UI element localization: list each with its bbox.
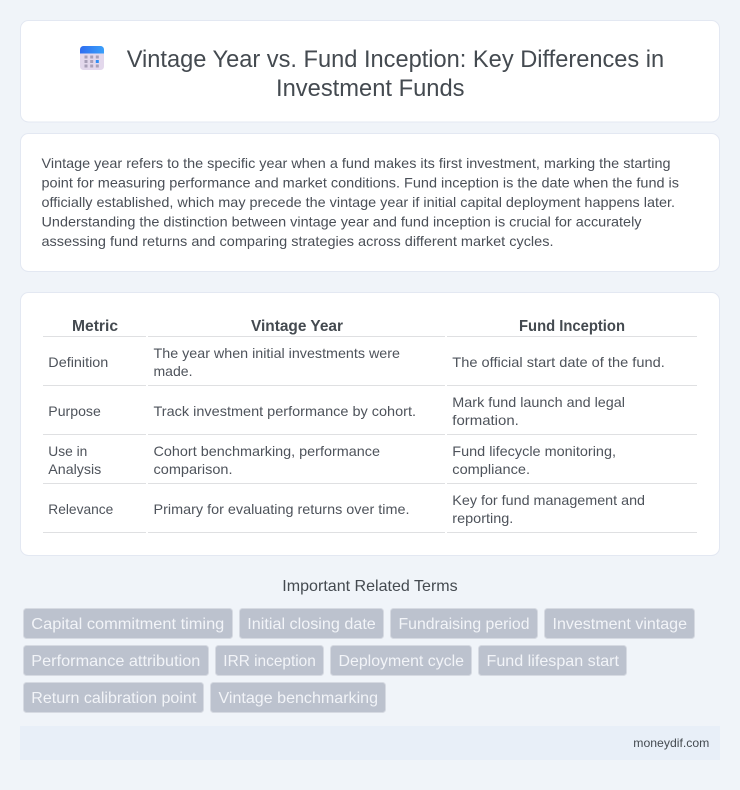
table row: use in analysis: compliance.	[452, 461, 530, 477]
table row: relevance: Primary for evaluating returns over time.	[154, 501, 410, 517]
tag: Deployment cycle	[338, 653, 464, 670]
table header row: Vintage Year	[251, 318, 343, 335]
table row: definition: The official start date of the fund.	[452, 354, 665, 370]
table row: purpose: Purpose	[48, 403, 101, 419]
tag	[24, 682, 204, 712]
footer bar	[20, 726, 720, 760]
table row: purpose: formation.	[452, 412, 519, 428]
table row: use in analysis: Cohort benchmarking, performance	[154, 443, 380, 459]
panel: intro paragraph	[20, 134, 720, 272]
text block: description: officially established, which may precede the vintage year if initial capital deployment happens later.	[42, 194, 675, 210]
heading: important related terms: Important Related Terms	[282, 578, 458, 595]
tag	[390, 608, 538, 638]
table row: relevance: reporting.	[452, 510, 513, 526]
tag: Performance attribution	[31, 653, 200, 670]
tag	[216, 646, 324, 676]
table row: use in analysis	[48, 443, 616, 477]
table row: use in analysis: Fund lifecycle monitoring,	[452, 443, 616, 459]
table header row	[72, 318, 625, 335]
icon: calendar	[80, 46, 104, 70]
table row: use in analysis: Use in	[48, 443, 87, 459]
header panel	[20, 20, 720, 122]
tag: Fundraising period	[398, 616, 530, 633]
title	[127, 46, 664, 102]
tag: IRR inception	[223, 653, 316, 670]
panel: related term tags	[24, 608, 694, 712]
tag: Investment vintage	[552, 616, 687, 633]
table row: purpose: Mark fund launch and legal	[452, 394, 625, 410]
tag	[478, 646, 626, 676]
title: Investment Funds	[276, 75, 464, 102]
text block: description: Vintage year refers to the specific year when a fund makes its first investment, marking the starting	[42, 155, 670, 171]
tag	[24, 608, 232, 638]
table header row: Fund Inception	[519, 318, 625, 335]
tag	[330, 646, 472, 676]
text block: description: point for measuring performance and market conditions. Fund inception is the date when the fund is	[42, 174, 679, 190]
table row: definition	[48, 345, 665, 379]
footer source text: moneydif.com	[633, 736, 709, 750]
table header row: Metric	[72, 318, 118, 335]
tag: Vintage benchmarking	[218, 690, 378, 707]
tag: Return calibration point	[31, 690, 197, 707]
tag: Fund lifespan start	[486, 653, 620, 670]
table row: purpose	[48, 394, 625, 428]
tag	[240, 608, 384, 638]
table row: use in analysis: comparison.	[154, 461, 232, 477]
text block: description: assessing fund returns and comparing strategies across different market cycles.	[42, 233, 554, 249]
tag	[24, 646, 208, 676]
panel: comparison table	[20, 292, 720, 556]
text block: description	[42, 155, 679, 249]
title: Vintage Year vs. Fund Inception: Key Differences in	[127, 46, 664, 73]
tag	[544, 608, 694, 638]
tag	[210, 682, 386, 712]
table row: relevance: Relevance	[48, 501, 114, 517]
table row: relevance: Key for fund management and	[452, 492, 645, 508]
table row: definition: Definition	[48, 354, 108, 370]
table row: purpose: Track investment performance by cohort.	[154, 403, 416, 419]
tag: Capital commitment timing	[31, 616, 224, 633]
tag: Initial closing date	[247, 616, 376, 633]
table row: use in analysis: Analysis	[48, 461, 101, 477]
table row: definition: The year when initial investments were	[154, 345, 400, 361]
table row: definition: made.	[154, 363, 192, 379]
text block: description: Understanding the distinction between vintage year and fund inception is crucial for accurately	[42, 214, 641, 230]
table row: relevance	[48, 492, 645, 526]
